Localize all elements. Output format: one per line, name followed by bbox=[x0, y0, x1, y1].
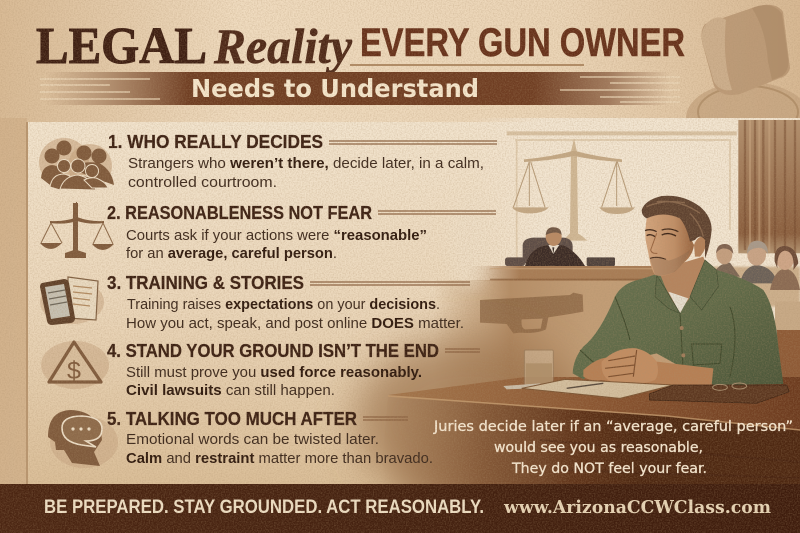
stubble bbox=[650, 250, 690, 276]
body 1: controlled courtroom. bbox=[128, 175, 277, 191]
body 4 bbox=[126, 365, 422, 399]
icon: head with speech bubble bbox=[48, 410, 118, 468]
footer bar bbox=[0, 484, 800, 533]
subtitle brush banner bbox=[40, 65, 680, 105]
hair bbox=[642, 196, 712, 258]
ear bbox=[694, 237, 706, 257]
body 3: Training raises expectations on your decisions. bbox=[127, 297, 440, 313]
heading 2: 2. REASONABLENESS NOT FEAR bbox=[107, 203, 372, 223]
wall scales of justice bbox=[512, 138, 635, 241]
item 1: who really decides bbox=[39, 132, 497, 191]
jury bbox=[707, 241, 800, 307]
curtains bbox=[738, 120, 800, 253]
heading 4: 4. STAND YOUR GROUND ISN’T THE END bbox=[107, 341, 439, 361]
body 2 bbox=[126, 228, 427, 262]
lower right wall and chair bbox=[775, 302, 800, 387]
icon: warning triangle with dollar: $ bbox=[67, 357, 81, 385]
item 5: talking too much after bbox=[48, 409, 433, 468]
subtitle text: Needs to Understand bbox=[191, 74, 479, 103]
room back wall frame bbox=[507, 133, 737, 263]
heading 3: 3. TRAINING & STORIES bbox=[107, 273, 304, 293]
icon: tablet and papers bbox=[40, 277, 104, 325]
papers bbox=[503, 379, 673, 398]
juries callout: Juries decide later if an “average, careful person” bbox=[433, 419, 793, 435]
body 1: Strangers who weren’t there, decide later, in a calm, bbox=[128, 156, 484, 172]
item 2: reasonableness not fear bbox=[40, 202, 496, 262]
title: LEGAL: LEGAL bbox=[36, 18, 207, 75]
shirt details bbox=[580, 297, 735, 377]
item 3: training and stories bbox=[40, 273, 470, 332]
icon: balance scale bbox=[40, 202, 114, 258]
footer slogan: BE PREPARED. STAY GROUNDED. ACT REASONABLY. bbox=[44, 497, 484, 518]
reading glasses bbox=[713, 383, 747, 390]
title: EVERY GUN OWNER: EVERY GUN OWNER bbox=[360, 21, 685, 65]
icon: group of people bbox=[39, 138, 114, 190]
body 1 bbox=[128, 156, 484, 191]
glass of water bbox=[524, 350, 553, 385]
body 3: How you act, speak, and post online DOES matter. bbox=[126, 316, 464, 332]
gun silhouette bbox=[480, 293, 583, 333]
icon: warning triangle with dollar bbox=[41, 341, 109, 389]
heading 1: 1. WHO REALLY DECIDES bbox=[108, 132, 323, 152]
body 4: Still must prove you used force reasonably. bbox=[126, 365, 422, 381]
leather folder bbox=[649, 385, 789, 403]
face bbox=[645, 213, 694, 276]
table top bbox=[388, 377, 800, 432]
neck and undershirt bbox=[658, 257, 707, 312]
left text panel bbox=[0, 118, 538, 484]
juries callout bbox=[433, 419, 793, 477]
table front bbox=[380, 396, 800, 484]
facial features bbox=[645, 229, 678, 259]
body 2: for an average, careful person. bbox=[126, 246, 337, 262]
body 3 bbox=[126, 297, 464, 332]
item 4: stand your ground bbox=[41, 341, 480, 399]
collar bbox=[655, 260, 718, 313]
juries callout: They do NOT feel your fear. bbox=[511, 461, 707, 477]
courtroom scene illustration bbox=[433, 118, 800, 388]
body 5: Emotional words can be twisted later. bbox=[126, 432, 379, 448]
soft blend between panel and scene bbox=[355, 190, 585, 505]
juries callout: would see you as reasonable, bbox=[494, 440, 703, 456]
body 5: Calm and restraint matter more than bravado. bbox=[126, 451, 433, 467]
defendant table bbox=[380, 377, 800, 484]
head and neck bbox=[642, 196, 718, 313]
arms and hands bbox=[583, 348, 713, 385]
seated man and desk items bbox=[503, 196, 789, 403]
title: Reality script: Reality bbox=[213, 18, 353, 74]
judge bbox=[505, 227, 615, 266]
body 2: Courts ask if your actions were “reasonable” bbox=[126, 228, 427, 244]
title bbox=[36, 18, 685, 75]
shirt bbox=[573, 260, 783, 385]
body 4: Civil lawsuits can still happen. bbox=[126, 383, 335, 399]
gavel watermark bbox=[686, 5, 800, 154]
heading 5: 5. TALKING TOO MUCH AFTER bbox=[107, 409, 357, 429]
footer website: www.ArizonaCCWClass.com bbox=[503, 497, 771, 518]
body 5 bbox=[126, 432, 433, 467]
judge bench and wall bbox=[433, 266, 713, 387]
